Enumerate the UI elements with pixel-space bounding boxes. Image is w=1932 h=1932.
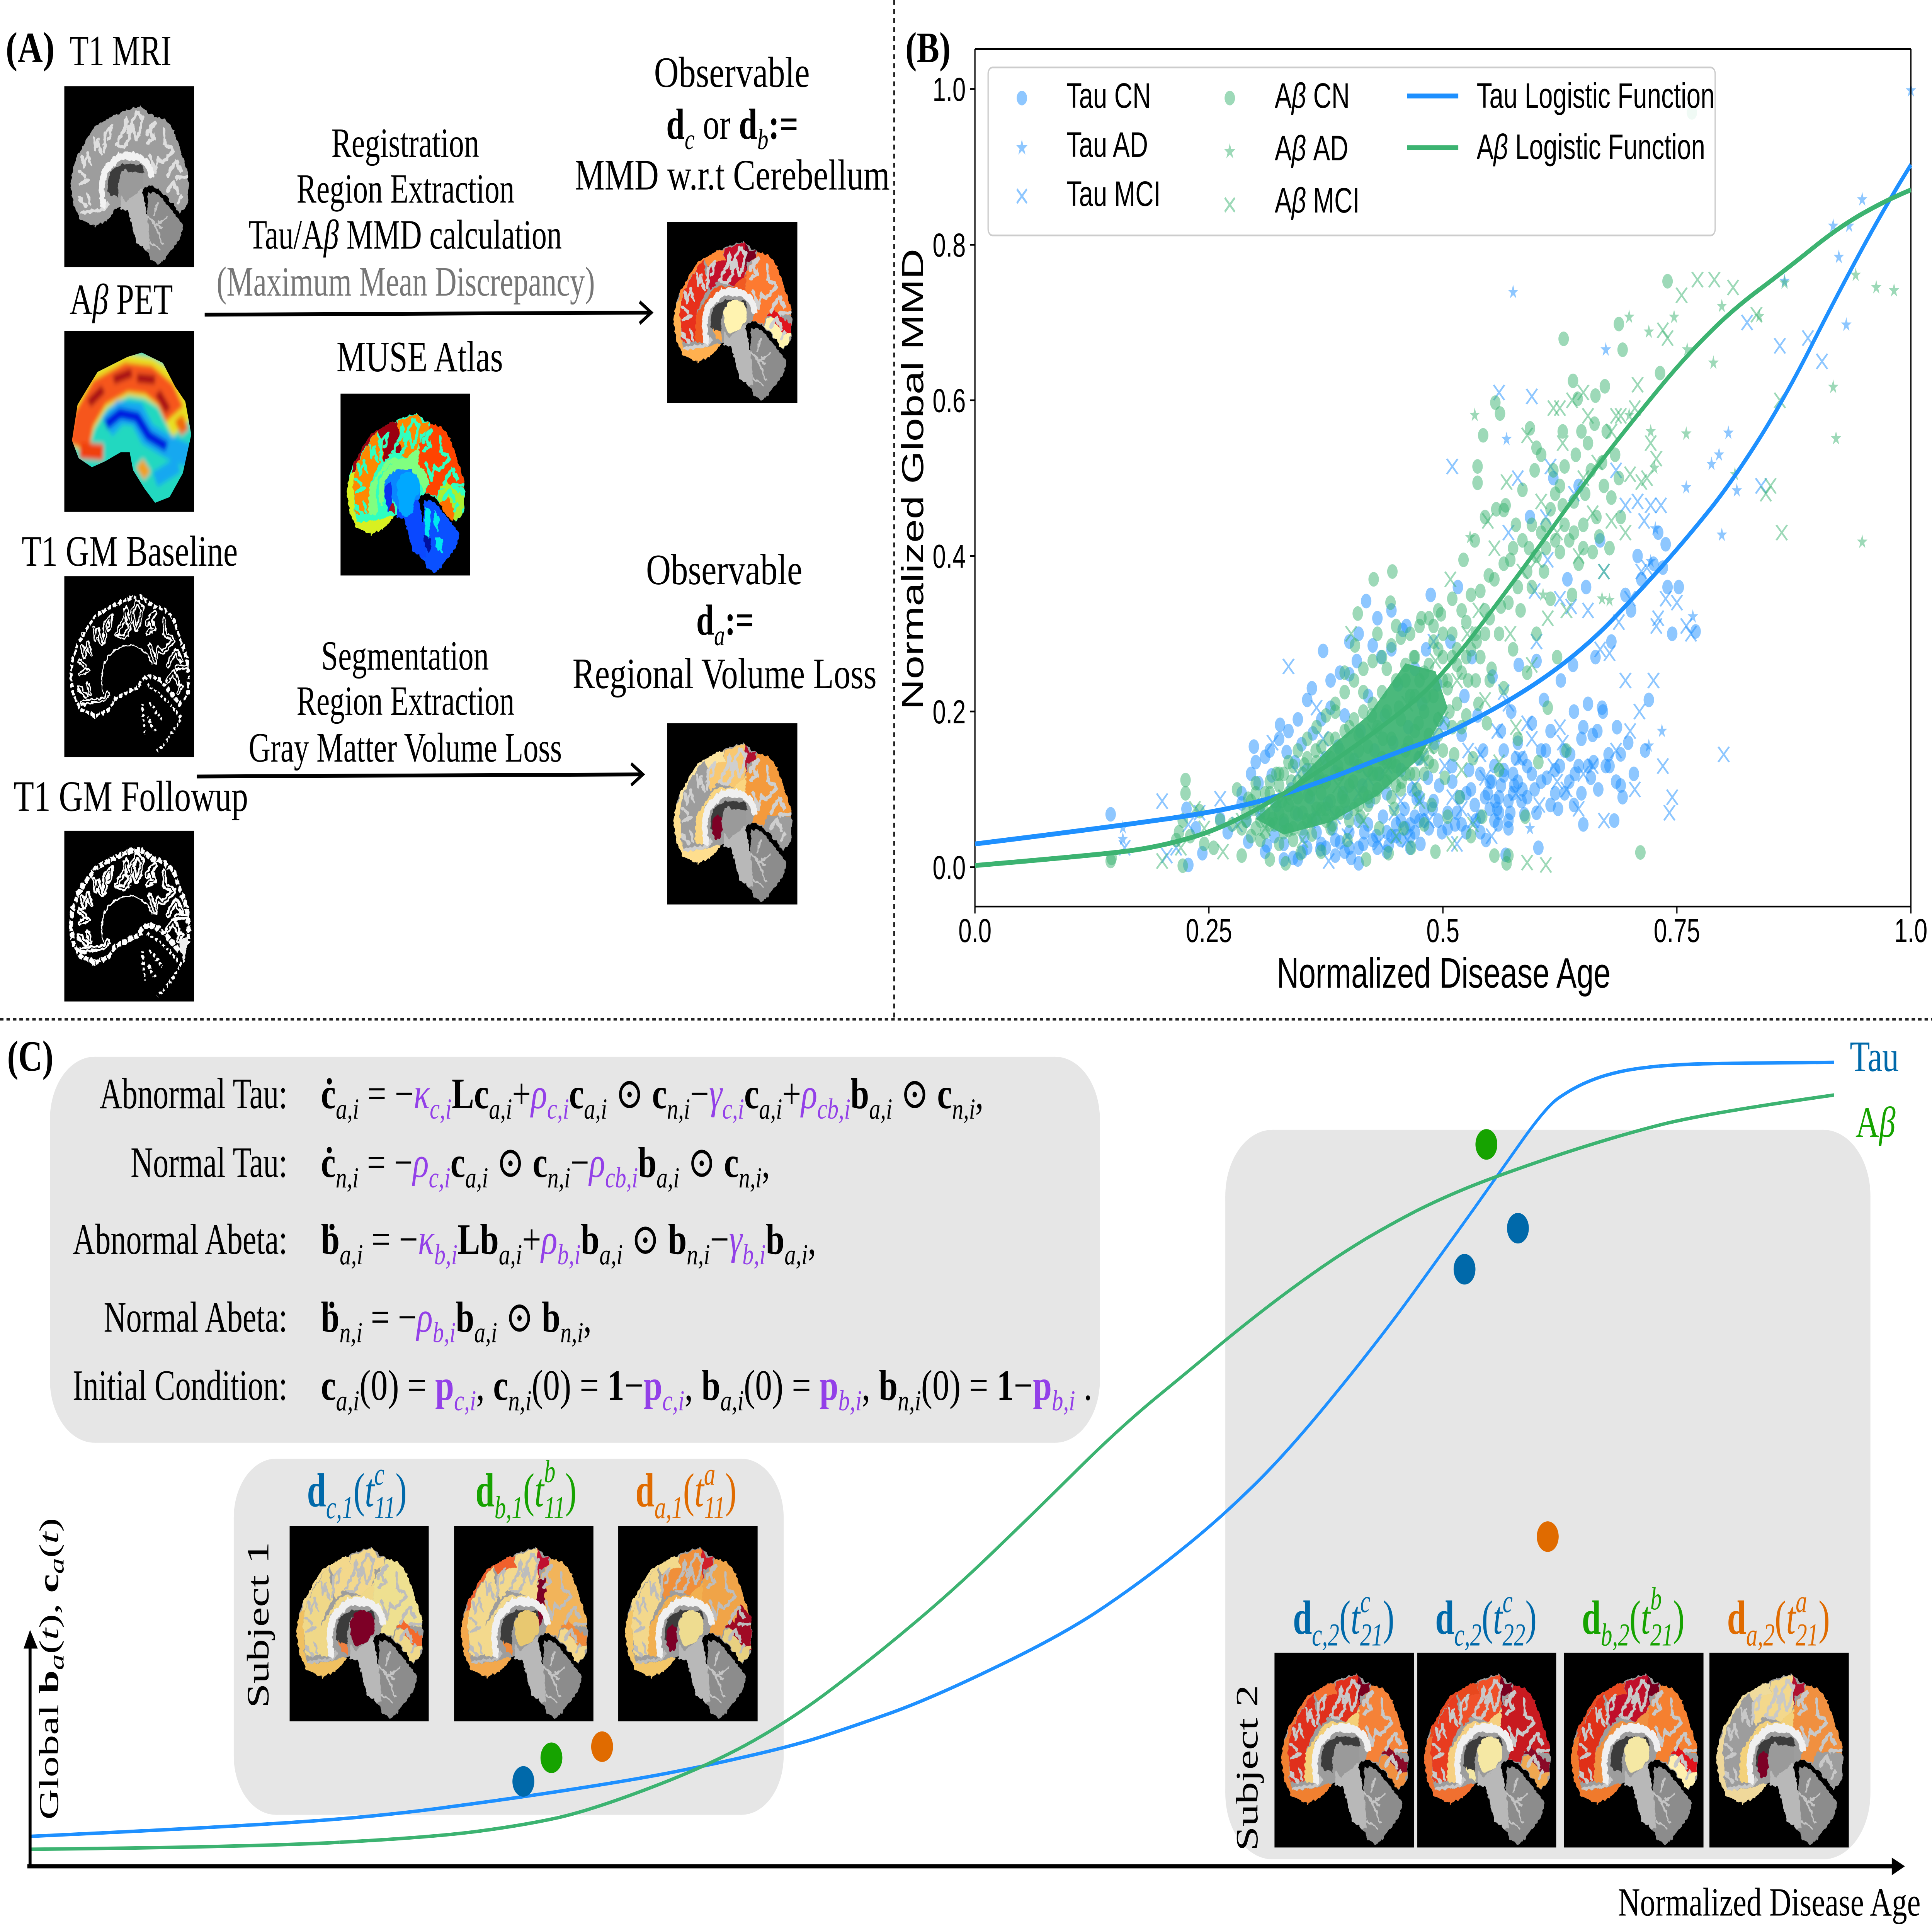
equation: normal tau: ċ — [321, 1139, 336, 1187]
equation: initial condition: p — [820, 1362, 838, 1410]
label d a,1: a — [704, 1456, 715, 1492]
label d b,1: ) — [565, 1464, 577, 1517]
x tick labels: 0.5 — [1426, 912, 1459, 949]
legend: Aβ MCI — [1275, 180, 1360, 220]
text block: Observable MMD: Observable — [654, 49, 810, 97]
equation: abnormal abeta: b — [766, 1216, 784, 1264]
equation: normal tau: n,i — [739, 1162, 762, 1194]
panel: equations — [50, 1057, 1100, 1443]
heading: Abeta PET: Aβ PET — [70, 276, 173, 324]
equation: normal tau: ρ — [412, 1139, 429, 1187]
label d c,1: c — [374, 1456, 384, 1492]
equation: initial condition: 1−p — [607, 1362, 661, 1410]
equation: normal abeta: a,i — [474, 1316, 497, 1349]
heading: T1 MRI: T1 MRI — [70, 27, 172, 75]
text block: Observable volume loss: Regional Volume Loss — [573, 650, 877, 698]
equation: normal tau: c,i — [429, 1162, 451, 1194]
label d b,1: t — [534, 1464, 545, 1517]
equation: abnormal tau: c,i — [430, 1093, 452, 1125]
label d c,2 t21: d — [1293, 1592, 1312, 1644]
equation: initial condition: c — [321, 1362, 336, 1410]
heading: T1 GM Followup: T1 GM Followup — [14, 773, 248, 821]
text block: MMD processing steps: Tau/Aβ MMD calculation — [248, 212, 562, 258]
image: T1 gray matter baseline — [64, 576, 194, 757]
label d b,2: b,2 — [1601, 1617, 1629, 1653]
equation: abnormal abeta: a,i — [499, 1238, 522, 1271]
image: T1 gray matter followup — [64, 831, 194, 1002]
equation: initial condition: p — [435, 1362, 454, 1410]
label d c,2 t21: 21 — [1360, 1617, 1383, 1653]
equation: normal tau: a,i — [465, 1162, 488, 1194]
equation: abnormal abeta: b,i — [742, 1238, 766, 1271]
label d c,1: ) — [395, 1464, 407, 1517]
subject 1 group — [241, 1454, 758, 1797]
equation: abnormal tau: ċ — [321, 1070, 336, 1118]
brain: subject 2 tau visit 2 — [1417, 1653, 1556, 1847]
equation: abnormal tau: a,i — [869, 1093, 892, 1125]
equation: abnormal tau: , — [975, 1070, 984, 1118]
label d c,2 t22: 22 — [1502, 1617, 1525, 1653]
Subject 1 label: Subject 1 — [241, 1542, 275, 1708]
Subject 2 label: Subject 2 — [1230, 1685, 1264, 1851]
equation: abnormal tau: − — [690, 1070, 709, 1118]
equation: abnormal tau: n,i — [667, 1093, 690, 1125]
equation labels: Normal Tau: — [131, 1139, 287, 1187]
legend: Tau Logistic Function — [1477, 76, 1715, 116]
equation: initial condition: (0) = — [921, 1362, 997, 1410]
legend: Tau MCI — [1066, 174, 1161, 213]
x axis title: Normalized Disease Age — [1277, 949, 1611, 997]
equation: initial condition: (0) = — [744, 1362, 820, 1410]
equation: abnormal abeta: n,i — [687, 1238, 710, 1271]
panel: Subject 1 background — [234, 1459, 784, 1815]
curve label Tau: Tau — [1850, 1033, 1899, 1081]
x tick labels: 0.75 — [1654, 912, 1700, 949]
equation: normal tau: ρ — [588, 1139, 605, 1187]
subject 2 group — [1230, 1129, 1849, 1851]
equation: normal tau: , — [762, 1139, 770, 1187]
brain: subject 2 abeta — [1564, 1653, 1704, 1847]
legend: Aβ CN — [1275, 76, 1350, 116]
equation: initial condition: b,i — [838, 1384, 862, 1417]
y tick labels: 0.4 — [933, 537, 966, 575]
brain: subject 2 atrophy — [1709, 1653, 1849, 1847]
equation: initial condition: . — [1075, 1362, 1092, 1410]
brain: subject 1 atrophy — [618, 1526, 758, 1721]
text block: Observable MMD: MMD w.r.t Cerebellum — [575, 151, 890, 199]
label d a,2: 21 — [1796, 1617, 1818, 1653]
equation: abnormal abeta: b — [581, 1216, 599, 1264]
label d c,2 t22: ) — [1525, 1592, 1537, 1644]
x tick labels — [958, 912, 1927, 949]
scatter points — [1111, 90, 1911, 866]
panel: C model schematic — [7, 1032, 1920, 1925]
equation labels — [73, 1070, 287, 1410]
text block: MMD processing steps: Registration — [332, 120, 479, 166]
equation: abnormal abeta: a,i — [784, 1238, 808, 1271]
heading: T1 GM Baseline: T1 GM Baseline — [22, 527, 238, 575]
label d c,1: d — [307, 1464, 326, 1517]
y axis arrow — [24, 1630, 38, 1866]
equation: abnormal abeta: ρ — [540, 1216, 557, 1264]
equation: initial condition: a,i — [720, 1384, 744, 1417]
legend: Tau CN — [1066, 76, 1151, 116]
equation: normal tau: n,i — [548, 1162, 570, 1194]
text block: Observable volume loss — [573, 546, 877, 698]
equation: abnormal abeta: Lb — [457, 1216, 499, 1264]
x axis arrow — [27, 1857, 1905, 1875]
label d b,2: 21 — [1650, 1617, 1673, 1653]
label d b,2: b — [1650, 1581, 1662, 1616]
text block: Observable MMD: := — [769, 100, 798, 148]
equation labels: Abnormal Tau: — [100, 1070, 287, 1118]
equation: abnormal tau: c,i — [722, 1093, 744, 1125]
label d a,1: 11 — [704, 1490, 725, 1525]
label d c,2 t21: c — [1360, 1583, 1370, 1619]
equation: abnormal tau: = − — [359, 1070, 413, 1118]
image: T1 MRI brain — [64, 86, 194, 267]
y axis label: t) — [34, 1519, 64, 1544]
image: Abeta PET heat map — [64, 331, 194, 512]
Abeta core density — [1256, 663, 1447, 835]
y axis label: a — [45, 1558, 68, 1574]
x tick labels: 1.0 — [1894, 912, 1927, 949]
equation labels: Initial Condition: — [73, 1362, 287, 1410]
label d c,2 t22: ( — [1481, 1592, 1493, 1644]
Tau MCI points — [1125, 323, 1822, 861]
equation: abnormal tau: c — [744, 1070, 759, 1118]
Tau AD points — [1123, 90, 1911, 839]
label d c,1: c,1 — [326, 1490, 353, 1525]
y tick labels: 0.8 — [933, 226, 966, 264]
image: MMD overlay brain — [667, 222, 798, 403]
y axis label: a — [45, 1654, 68, 1670]
label d a,2: d — [1727, 1592, 1746, 1644]
y tick labels: 1.0 — [933, 71, 966, 108]
equation: initial condition: b — [701, 1362, 720, 1410]
text block: Observable MMD — [575, 49, 890, 199]
arrow: to volume observable — [197, 764, 643, 785]
Abeta MCI points — [1162, 280, 1782, 865]
label d b,1: d — [475, 1464, 495, 1517]
equation: abnormal abeta: γ — [729, 1216, 743, 1264]
equation: initial condition: n,i — [508, 1384, 532, 1417]
equation: initial condition: b — [879, 1362, 898, 1410]
equation: abnormal tau: + — [512, 1070, 531, 1118]
y tick labels: 0.6 — [933, 382, 966, 419]
equation: initial condition: (0) = — [359, 1362, 435, 1410]
equation: normal tau: ⊙ — [488, 1139, 533, 1187]
equation: initial condition: 1−p — [997, 1362, 1050, 1410]
label d b,2: t — [1641, 1592, 1651, 1644]
data points: subject 2 — [1454, 1129, 1559, 1552]
equation: initial condition: , — [862, 1362, 879, 1410]
x tick labels: 0.25 — [1186, 912, 1232, 949]
label d a,2: ( — [1775, 1592, 1786, 1644]
equation: normal tau: c — [724, 1139, 739, 1187]
equation: abnormal tau: + — [782, 1070, 801, 1118]
equation: normal abeta: ⊙ — [497, 1294, 542, 1342]
text block: volume processing steps: Region Extraction — [297, 678, 514, 724]
equation: normal abeta: b — [542, 1294, 560, 1342]
text block: volume processing steps: Gray Matter Volume Loss — [248, 724, 562, 771]
y axis label: t), c — [34, 1576, 64, 1640]
equation: abnormal abeta: κ — [418, 1216, 435, 1264]
label d b,1: b,1 — [495, 1490, 523, 1525]
label d c,2 t22: c — [1502, 1583, 1513, 1619]
equation: normal tau: − — [570, 1139, 589, 1187]
legend: Aβ AD — [1275, 128, 1349, 168]
label d c,1: ( — [353, 1464, 365, 1517]
text block: MMD processing steps — [217, 120, 595, 305]
text block: Observable MMD: c — [685, 123, 694, 156]
equation: initial condition: , — [476, 1362, 493, 1410]
equation: normal abeta: ρ — [416, 1294, 433, 1342]
panel label A: (A) — [6, 24, 54, 72]
text block: Observable volume loss: := — [725, 596, 754, 645]
label d b,2: ( — [1629, 1592, 1641, 1644]
equation: abnormal tau: Lc — [452, 1070, 489, 1118]
equation: normal tau: n,i — [336, 1162, 359, 1194]
text block: MMD processing steps: (Maximum Mean Discrepancy) — [217, 259, 595, 305]
equation: abnormal tau: a,i — [489, 1093, 512, 1125]
legend: Aβ Logistic Function — [1477, 127, 1705, 167]
equation: normal tau: c — [451, 1139, 465, 1187]
equation: abnormal abeta: ḃ — [321, 1216, 340, 1264]
panel: Subject 2 background — [1225, 1130, 1871, 1859]
x tick labels: 0.0 — [958, 912, 992, 949]
curve label Abeta: Aβ — [1855, 1099, 1896, 1146]
equation: abnormal abeta: a,i — [340, 1238, 363, 1271]
equation: normal abeta: , — [583, 1294, 592, 1342]
equation: initial condition: b,i — [1052, 1384, 1075, 1417]
label d b,1: ( — [523, 1464, 534, 1517]
label d a,2: a — [1796, 1583, 1807, 1619]
equation: normal tau: ⊙ — [679, 1139, 724, 1187]
equation: initial condition: , — [684, 1362, 701, 1410]
text block: Observable volume loss: Observable — [646, 546, 802, 594]
equation: normal abeta: b — [456, 1294, 474, 1342]
Abeta AD points — [1470, 275, 1894, 600]
plot frame — [975, 49, 1911, 906]
equation labels: Abnormal Abeta: — [73, 1216, 287, 1264]
text block: Observable MMD: b — [757, 123, 769, 156]
label d c,2 t21: c,2 — [1312, 1617, 1339, 1653]
text block: Observable MMD: d — [666, 100, 685, 148]
label d c,2 t22: t — [1493, 1592, 1503, 1644]
label d b,1: 11 — [544, 1490, 565, 1525]
panel: A data processing pipeline — [6, 24, 890, 1002]
label d a,1: d — [635, 1464, 655, 1517]
label d a,2: ) — [1818, 1592, 1830, 1644]
label d c,1: t — [365, 1464, 375, 1517]
equation: abnormal tau: ⊙ — [607, 1070, 652, 1118]
equation: normal tau: b — [638, 1139, 656, 1187]
equation: abnormal tau: c — [652, 1070, 667, 1118]
equation: abnormal abeta: a,i — [599, 1238, 623, 1271]
label d c,2 t21: ) — [1383, 1592, 1395, 1644]
equation: abnormal tau: γ — [709, 1070, 723, 1118]
y axis label: ( — [34, 1640, 64, 1654]
text block: MMD processing steps: Region Extraction — [297, 166, 514, 212]
equation: abnormal abeta: ⊙ — [623, 1216, 668, 1264]
equation: abnormal abeta: b,i — [434, 1238, 457, 1271]
y tick labels: 0.0 — [933, 849, 966, 886]
equation: normal tau: a,i — [656, 1162, 679, 1194]
equation: abnormal tau: ρ — [530, 1070, 547, 1118]
equation: normal abeta: b,i — [433, 1316, 456, 1349]
equation: normal tau: = − — [359, 1139, 413, 1187]
equation: normal abeta: ḃ — [321, 1294, 340, 1342]
equation labels: Normal Abeta: — [104, 1294, 287, 1342]
equation: initial condition: c — [493, 1362, 508, 1410]
y tick labels — [933, 71, 966, 886]
x axis label: Normalized Disease Age — [1618, 1881, 1920, 1925]
panel label B: (B) — [905, 24, 951, 72]
equation: abnormal abeta: + — [522, 1216, 541, 1264]
text block: volume processing steps: Segmentation — [321, 633, 489, 679]
arrow: to MMD observable — [205, 302, 651, 323]
y axis label: Global b — [34, 1672, 64, 1820]
equation: normal abeta: n,i — [560, 1316, 583, 1349]
equation: initial condition: n,i — [898, 1384, 921, 1417]
text block: Observable volume loss: a — [714, 619, 725, 652]
brain: subject 1 tau — [290, 1526, 429, 1721]
label d b,1: b — [544, 1454, 555, 1489]
panel label C: (C) — [7, 1032, 53, 1080]
label d b,2: ) — [1673, 1592, 1685, 1644]
label d c,2 t22: d — [1435, 1592, 1454, 1644]
panel: B scatter chart — [896, 24, 1927, 997]
Abeta CN points — [1111, 112, 1692, 866]
label d a,1: a,1 — [655, 1490, 683, 1525]
image: MUSE atlas parcellation — [340, 394, 470, 575]
equation: initial condition: (0) = — [532, 1362, 607, 1410]
equation: abnormal tau: cb,i — [817, 1093, 850, 1125]
Tau CN points — [1111, 478, 1696, 865]
equation: abnormal tau: a,i — [336, 1093, 359, 1125]
heading: MUSE Atlas: MUSE Atlas — [337, 333, 503, 381]
equation: abnormal tau: κ — [413, 1070, 430, 1118]
equation: normal abeta: n,i — [340, 1316, 362, 1349]
label d c,2 t22: c,2 — [1454, 1617, 1481, 1653]
label d b,2: d — [1582, 1592, 1601, 1644]
label d a,2: a,2 — [1746, 1617, 1775, 1653]
label d a,1: t — [694, 1464, 705, 1517]
logistic curve: Tau — [975, 165, 1911, 844]
label d a,1: ( — [683, 1464, 694, 1517]
text block: Observable MMD: d — [739, 100, 757, 148]
equation: abnormal tau: ρ — [800, 1070, 817, 1118]
equation: initial condition: c,i — [662, 1384, 684, 1417]
equation: abnormal tau: a,i — [584, 1093, 607, 1125]
label d c,2 t21: t — [1350, 1592, 1361, 1644]
equation: abnormal abeta: = − — [363, 1216, 418, 1264]
equation: abnormal tau: c — [937, 1070, 952, 1118]
legend: Tau AD — [1066, 125, 1148, 164]
text block: Observable MMD: or — [694, 100, 739, 148]
image: volume loss overlay brain — [667, 723, 798, 905]
equation: abnormal tau: a,i — [759, 1093, 782, 1125]
y tick labels: 0.2 — [933, 693, 966, 730]
logistic curve: Abeta — [975, 190, 1911, 866]
equation: abnormal abeta: b,i — [557, 1238, 581, 1271]
label d a,1: ) — [725, 1464, 736, 1517]
equation: normal abeta: = − — [362, 1294, 417, 1342]
text block: volume processing steps — [248, 633, 562, 771]
data points: subject 1 — [512, 1731, 613, 1797]
equation: normal tau: cb,i — [605, 1162, 638, 1194]
equation: abnormal abeta: b — [668, 1216, 687, 1264]
equation: abnormal abeta: , — [808, 1216, 816, 1264]
equation: initial condition: a,i — [336, 1384, 359, 1417]
brain: subject 2 tau visit 1 — [1274, 1653, 1414, 1847]
y axis label: ( — [34, 1544, 64, 1558]
equation: abnormal tau: c — [569, 1070, 584, 1118]
equation: abnormal tau: ⊙ — [892, 1070, 937, 1118]
equation: normal tau: c — [533, 1139, 548, 1187]
label d a,2: t — [1786, 1592, 1797, 1644]
equation: abnormal tau: c,i — [547, 1093, 569, 1125]
text block: Observable volume loss: d — [696, 596, 714, 645]
y axis title: Normalized Global MMD — [896, 248, 930, 710]
legend — [988, 68, 1715, 235]
curve: Tau schematic — [30, 1062, 1834, 1837]
label d c,2 t21: ( — [1339, 1592, 1350, 1644]
label d c,1: 11 — [374, 1490, 395, 1525]
equation: abnormal tau: n,i — [952, 1093, 975, 1125]
brain: subject 1 abeta — [454, 1526, 594, 1721]
equation: abnormal tau: b — [850, 1070, 869, 1118]
equation: initial condition: c,i — [454, 1384, 476, 1417]
curve: Abeta schematic — [30, 1095, 1834, 1849]
equation: abnormal abeta: − — [710, 1216, 729, 1264]
